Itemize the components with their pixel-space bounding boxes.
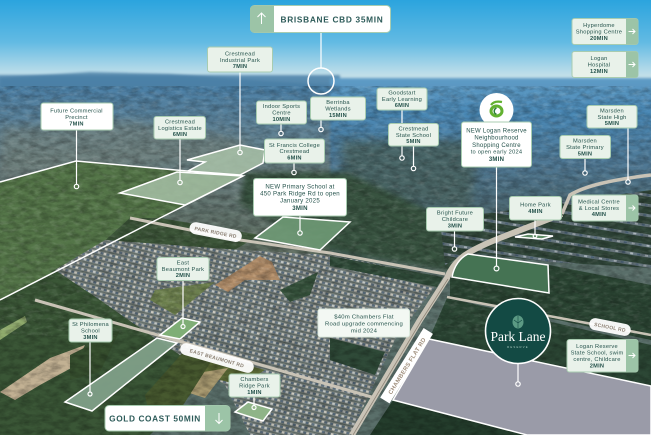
- callout: Logan Hospital: 12MIN: [590, 69, 608, 75]
- callout: Logan Reserve State School: 2MIN: [590, 364, 604, 370]
- parcel: home park: [515, 234, 553, 239]
- callout: Logan Reserve State School: State School, swim: [571, 350, 623, 356]
- callout: Medical Centre and Local Stores: [572, 195, 638, 221]
- callout: Berrinba Wetlands: Berrinba: [326, 100, 350, 106]
- callout: Crestmead Industrial Park: [208, 47, 272, 155]
- callout: St Philomena School: St Philomena: [72, 322, 110, 328]
- callout: Logan Hospital: Hospital: [588, 62, 610, 68]
- callout: Future Commercial Precinct: Precinct: [65, 115, 88, 121]
- parcel: future commercial outline: [0, 161, 243, 300]
- callout: new primary school: 3MIN: [292, 205, 308, 212]
- Park Lane Reserve logo marker: Park Lane: [490, 329, 546, 344]
- callout: new primary school: [254, 178, 346, 235]
- central suburb housing: [55, 240, 443, 435]
- callout: Marsden State High: [587, 106, 637, 184]
- dark trees beside Chambers Flat Road: [330, 338, 385, 375]
- road label: Chambers Flat Rd: [380, 328, 433, 403]
- callout: St Francis College: [264, 139, 324, 175]
- callout: Marsden State Primary: State Primary: [566, 145, 604, 151]
- callout: Chambers Ridge Park: Chambers: [240, 377, 269, 383]
- callout: Logan Reserve Neighbourhood Shopping Centre: 3MIN: [489, 157, 504, 163]
- callout: Hyperdome Shopping Centre: [572, 18, 638, 45]
- callout: Medical Centre and Local Stores: & Local Stores: [579, 206, 619, 212]
- callout: Crestmead Industrial Park: Crestmead: [225, 52, 255, 58]
- Park Lane Reserve logo marker: RESERVE: [507, 345, 529, 349]
- east forest: [450, 265, 651, 340]
- road label: School Rd: SCHOOL RD: [593, 322, 626, 334]
- callout: Chambers Flat Road upgrade: [318, 309, 410, 337]
- callout: Bright Future Childcare: [426, 208, 484, 251]
- road label: East Beaumont Rd: EAST BEAUMONT RD: [189, 348, 245, 370]
- east suburbs: [440, 190, 651, 268]
- callout: East Beaumont Park: Beaumont Park: [162, 267, 204, 273]
- parcel: Park Lane site: [393, 339, 651, 435]
- callout: Future Commercial Precinct: Future Commercial: [50, 108, 103, 114]
- callout: Marsden State Primary: Marsden: [573, 138, 597, 144]
- callout: Chambers Ridge Park: [229, 374, 280, 410]
- south-west suburb: [330, 360, 375, 435]
- callout: Chambers Flat Road upgrade: $40m Chambers Flat: [334, 314, 394, 320]
- callout: Indoor Sports Centre: 10MIN: [272, 117, 291, 123]
- callout: Crestmead Logistics Estate: Crestmead: [165, 120, 195, 126]
- callout: Crestmead Logistics Estate: 6MIN: [173, 132, 187, 138]
- callout: Marsden State High: Marsden: [600, 108, 624, 114]
- callout: new primary school: NEW Primary School at: [265, 184, 335, 190]
- callout: St Philomena School: School: [81, 328, 100, 334]
- parcel: St Philomena school: [65, 338, 177, 411]
- callout: East Beaumont Park: [157, 258, 209, 328]
- road label: Chambers Flat Rd: CHAMBERS FLAT RD: [388, 337, 428, 396]
- parcel: Chambers Ridge park: [235, 402, 272, 421]
- callout: Medical Centre and Local Stores: 4MIN: [592, 212, 606, 218]
- callout: Chambers Flat Road upgrade: Road upgrade commencing: [325, 322, 403, 328]
- callout: Marsden State High: 5MIN: [605, 121, 619, 127]
- callout: St Francis College: 6MIN: [287, 156, 302, 162]
- callout: East Beaumont Park: 2MIN: [176, 273, 190, 279]
- distant landscape: [0, 72, 651, 258]
- callout: Bright Future Childcare: Childcare: [442, 217, 468, 223]
- callout: Crestmead State School: [388, 124, 438, 171]
- callout: Logan Reserve State School: centre, Childcare: [573, 357, 621, 363]
- callout: Marsden State Primary: 5MIN: [578, 152, 592, 158]
- parcel: shopping centre: [452, 254, 549, 293]
- callout: Future Commercial Precinct: 7MIN: [69, 122, 84, 128]
- callout: Medical Centre and Local Stores: Medical Centre: [578, 200, 620, 206]
- callout: Crestmead Industrial Park: Industrial Park: [220, 58, 260, 64]
- callout: Berrinba Wetlands: [310, 97, 366, 132]
- callout: Home Park: [510, 196, 562, 238]
- callout: Marsden State High: State High: [597, 115, 627, 121]
- callout: Hyperdome Shopping Centre: 20MIN: [590, 36, 608, 42]
- Woolworths logo badge: [480, 93, 514, 127]
- roads: [35, 175, 651, 435]
- callout: Goodstart Early Learning: Early Learning: [382, 97, 422, 103]
- forest around school road: [429, 298, 651, 392]
- callout: Crestmead State School: Crestmead: [398, 126, 429, 132]
- callout: Brisbane CBD: [250, 6, 390, 94]
- parcel: East Beaumont park: [160, 318, 200, 339]
- callout: Gold Coast: [105, 406, 230, 431]
- callout: Indoor Sports Centre: Indoor Sports: [263, 104, 300, 110]
- callout: Logan Reserve Neighbourhood Shopping Centre: to open early 2024: [471, 150, 522, 156]
- south forest: [370, 400, 527, 435]
- callout: Home Park: 4MIN: [528, 209, 543, 215]
- callout: Home Park: Home Park: [520, 202, 551, 208]
- callout: East Beaumont Park: East: [177, 260, 189, 266]
- callout: Crestmead Logistics Estate: Logistics Estate: [158, 126, 202, 132]
- callout: Bright Future Childcare: 3MIN: [448, 224, 462, 230]
- callout: Logan Hospital: Logan: [590, 56, 608, 62]
- callout: Goodstart Early Learning: 6MIN: [395, 103, 409, 109]
- road label: Park Ridge Rd: [189, 221, 243, 243]
- callout: Goodstart Early Learning: Goodstart: [388, 90, 416, 96]
- forest parcel: future commercial precinct: [0, 161, 243, 300]
- callout: St Francis College: St Francis College: [269, 143, 320, 149]
- west forest and construction strip: [0, 218, 260, 435]
- callout: Logan Reserve Neighbourhood Shopping Centre: NEW Logan Reserve: [466, 128, 527, 134]
- dark forest right of school site: [240, 172, 455, 272]
- callout: Future Commercial Precinct: [41, 103, 113, 189]
- parcel: industrial park: [187, 145, 265, 175]
- callout: Chambers Flat Road upgrade: mid 2024: [351, 328, 378, 334]
- callout: new primary school: 450 Park Ridge Rd to open: [260, 190, 340, 198]
- callout: Berrinba Wetlands: 15MIN: [329, 113, 347, 119]
- callout: Logan Reserve State School: [567, 340, 638, 372]
- callout: Bright Future Childcare: Bright Future: [437, 210, 473, 216]
- callout: Chambers Ridge Park: 1MIN: [247, 390, 262, 396]
- callout: Crestmead State School: State School: [396, 133, 431, 139]
- parcel: logistics estate: [120, 172, 243, 205]
- sky: [0, 0, 651, 84]
- callout: Marsden State Primary: [560, 136, 610, 175]
- callout: new primary school: January 2025: [280, 198, 320, 204]
- callout: Gold Coast: GOLD COAST 50MIN: [109, 414, 201, 424]
- callout: Logan Reserve Neighbourhood Shopping Centre: Shopping Centre: [472, 143, 521, 149]
- callout: Logan Reserve Neighbourhood Shopping Centre: [462, 122, 532, 271]
- callout: Indoor Sports Centre: [256, 101, 306, 136]
- parcel: primary school: [255, 217, 350, 250]
- road label: Park Ridge Rd: PARK RIDGE RD: [194, 226, 237, 240]
- callout: Crestmead Logistics Estate: [154, 116, 206, 185]
- callout: Crestmead State School: 5MIN: [406, 139, 421, 145]
- callout: Logan Reserve Neighbourhood Shopping Centre: Neighbourhood: [474, 136, 519, 142]
- callout: Crestmead Industrial Park: 7MIN: [233, 64, 247, 70]
- callout: Chambers Ridge Park: Ridge Park: [239, 384, 270, 390]
- callout: St Philomena School: 3MIN: [83, 335, 98, 341]
- callout: Hyperdome Shopping Centre: Shopping Centre: [576, 30, 622, 36]
- road label: School Rd: [588, 317, 632, 337]
- callout: St Francis College: Crestmead: [279, 149, 310, 155]
- callout: Brisbane CBD: BRISBANE CBD 35MIN: [281, 14, 383, 24]
- Park Lane Reserve logo marker: [486, 298, 550, 386]
- callout: Logan Reserve State School: Logan Reserve: [576, 344, 618, 350]
- road label: East Beaumont Rd: [179, 342, 255, 374]
- callout: Hyperdome Shopping Centre: Hyperdome: [583, 23, 615, 29]
- callout: Berrinba Wetlands: Wetlands: [325, 106, 351, 112]
- callout: Goodstart Early Learning: [377, 88, 427, 160]
- callout: St Philomena School: [69, 319, 112, 396]
- callout: Logan Hospital: [572, 52, 638, 78]
- callout: Indoor Sports Centre: Centre: [272, 110, 291, 116]
